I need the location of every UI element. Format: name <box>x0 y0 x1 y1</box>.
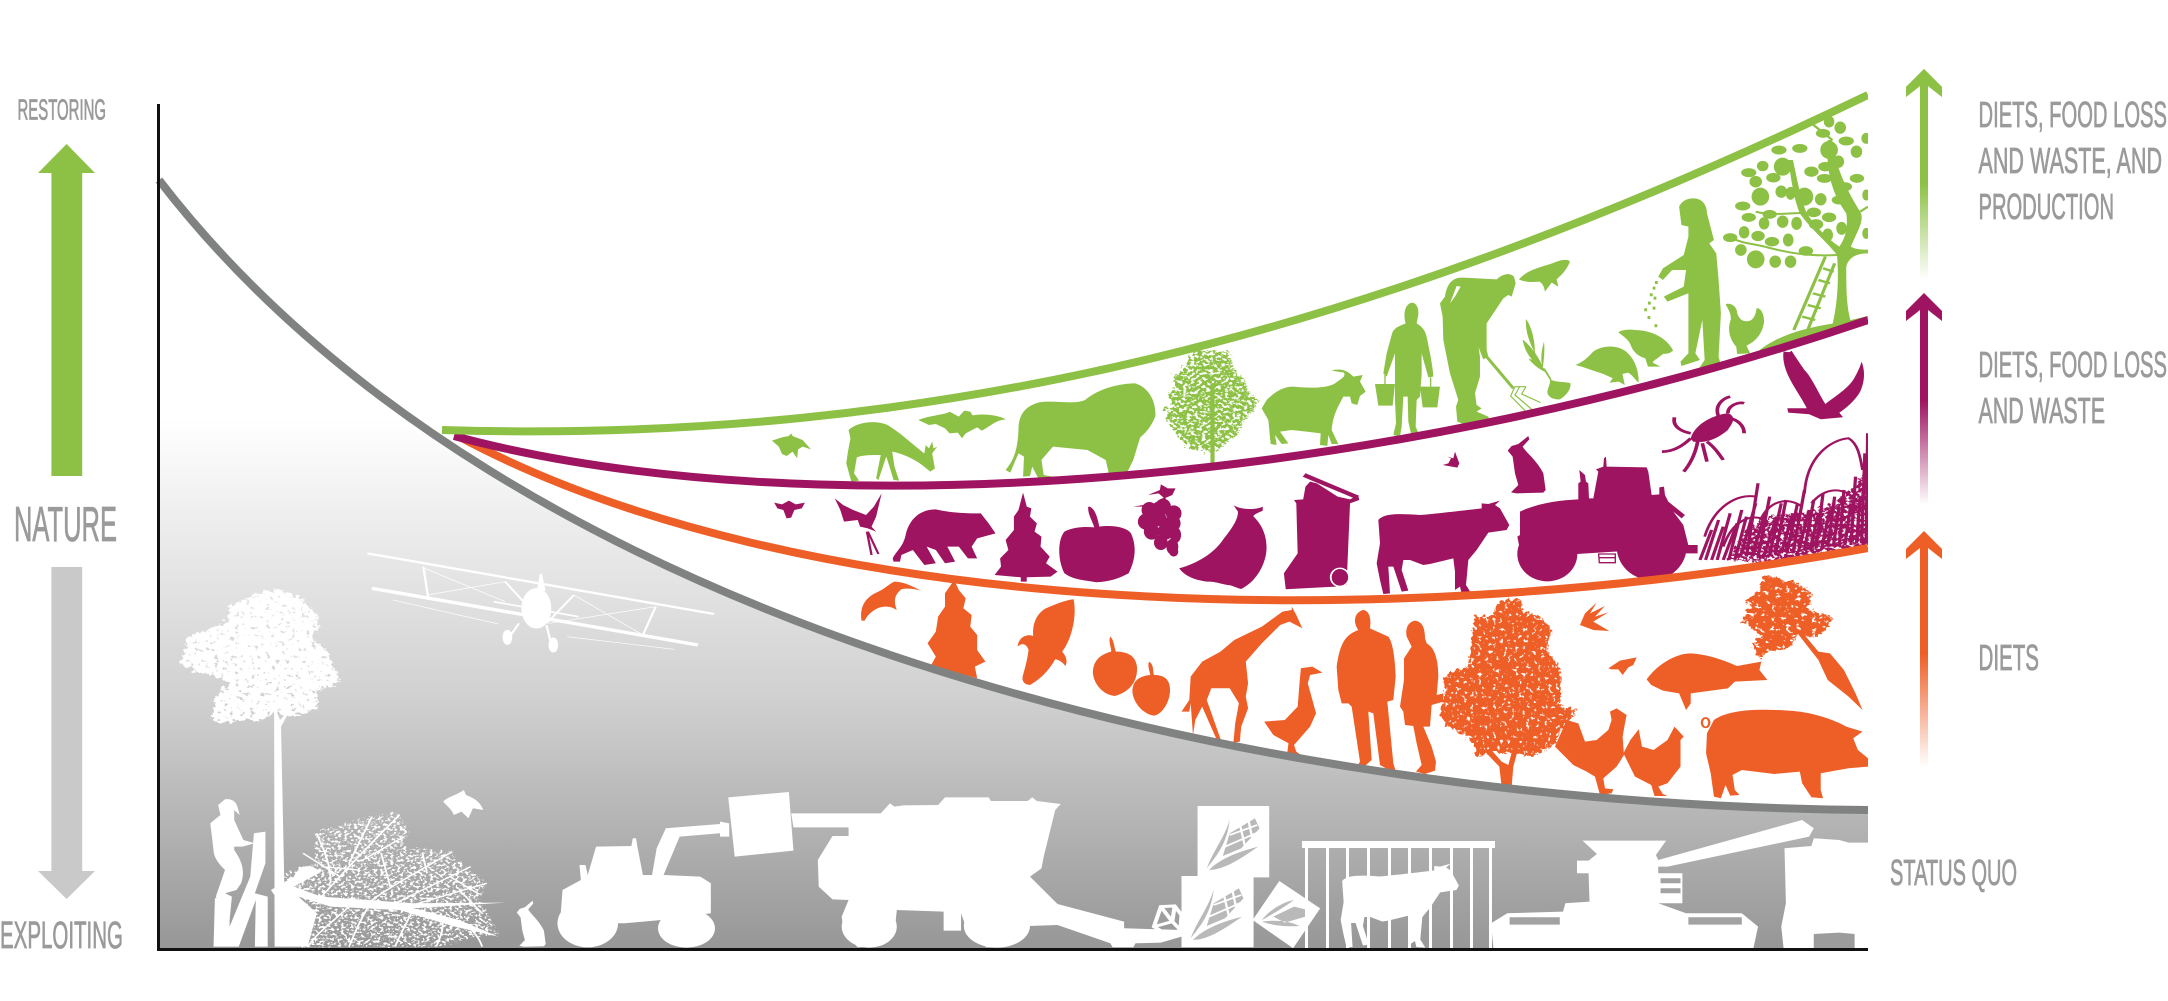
icon: crab <box>1662 397 1744 472</box>
axis label: nature: NATURE <box>14 498 117 552</box>
icon: bananas <box>1179 505 1267 589</box>
icon: fallen tree twigs <box>285 813 501 947</box>
icon: left scene <box>181 553 720 948</box>
panel: purple band left icons <box>774 475 1359 589</box>
panel: orange band left icons <box>861 580 1322 755</box>
icon: hawk <box>1783 351 1864 419</box>
icon: carrot top <box>1742 575 1833 658</box>
icon: tractor with loader <box>557 824 720 948</box>
icon: hen pecking back <box>1576 347 1639 385</box>
label: diets, food loss and waste, and production <box>1978 94 2167 227</box>
line: diets, food loss and production trajectory <box>442 95 1868 431</box>
panel: coloured icons <box>772 117 1870 798</box>
icon: fruit tree with ladder <box>1724 117 1870 353</box>
panel: orange band middle icons <box>1337 599 1637 795</box>
icon: standing tree crown <box>181 588 340 723</box>
icon: onion plant <box>1523 319 1571 399</box>
label: status quo: STATUS QUO <box>1890 852 2017 893</box>
icon: man <box>1337 610 1396 771</box>
arrow: restoring up <box>38 144 95 476</box>
icon: falling seeds <box>1644 281 1658 327</box>
icon: combine harvester <box>1491 820 1814 948</box>
icon: hex wheel <box>1154 906 1181 935</box>
axis: vertical and horizontal <box>158 104 1868 950</box>
icon: cut stump <box>214 832 268 947</box>
icon: orange butterfly <box>1608 657 1637 675</box>
icon: deer <box>846 422 937 482</box>
icon: carrot <box>1798 633 1863 710</box>
icon: waste bin <box>1284 475 1359 589</box>
icon: moth <box>772 433 811 458</box>
icon: grain cart <box>791 797 1181 948</box>
icon: crop-duster plane <box>367 553 714 652</box>
icon: standing rooster <box>1726 304 1764 354</box>
panel: green band middle icons <box>1262 260 1571 446</box>
icon: rice grass <box>1700 433 1869 563</box>
icon: corn <box>1018 599 1075 685</box>
panel: white silhouettes of exploitation <box>181 553 1868 948</box>
icon: swallow <box>1580 603 1609 631</box>
icon: standing tree trunk <box>266 703 294 947</box>
icon: lion <box>1006 383 1155 481</box>
icon: spruce <box>995 493 1058 582</box>
label: diets, food loss and waste <box>1978 344 2167 431</box>
icon: small swallow <box>1443 452 1459 468</box>
icon: rooster <box>1555 708 1627 795</box>
arrow: purple scenario <box>1920 400 1928 505</box>
icon: giraffe <box>1181 607 1302 743</box>
panel: purple band far right icons <box>1662 351 1864 472</box>
icon: hare <box>517 901 546 947</box>
arrow: purple scenario head <box>1906 293 1942 400</box>
icon: goat <box>1262 370 1366 446</box>
icon: cattle cage <box>1302 841 1495 948</box>
panel: green band right icons <box>1576 117 1870 385</box>
icon: right combine scene <box>1491 820 1868 948</box>
icon: rabbit <box>1508 436 1546 493</box>
icon: person with buckets <box>1375 303 1440 437</box>
icon: fish <box>1647 653 1767 710</box>
icon: grain truck <box>1781 838 1868 948</box>
panel: orange band right icons <box>1623 575 1868 798</box>
icon: grapes <box>1133 484 1181 557</box>
icon: birch tree crown <box>1161 350 1260 452</box>
icon: header teeth <box>1510 878 1742 925</box>
icon: peppers <box>1093 637 1170 716</box>
icon: goose <box>1264 667 1322 755</box>
arrow: orange scenario head <box>1906 531 1942 653</box>
icon: cow <box>1377 501 1509 594</box>
axis label: exploiting: EXPLOITING <box>0 915 123 957</box>
icon: butterfly <box>443 790 483 818</box>
icon: orange tree crown <box>1440 599 1577 757</box>
label: diets: DIETS <box>1978 637 2039 678</box>
icon: pig <box>1702 710 1868 798</box>
icon: large butterfly <box>1519 260 1570 292</box>
icon: heron <box>835 493 882 555</box>
icon: orange tree trunk <box>1487 747 1518 787</box>
icon: truck cab cut-out <box>1814 933 1855 948</box>
icon: fallen tree branches <box>271 815 505 947</box>
icon: woman <box>1400 621 1443 774</box>
icon: woman feeding chickens <box>1658 198 1721 368</box>
line: diets trajectory <box>458 436 1868 600</box>
icon: farmer with fork <box>1440 274 1541 424</box>
panel: trajectory curves <box>159 95 1868 810</box>
arrow: green scenario <box>1906 69 1942 280</box>
arrow: green scenario head <box>1906 69 1942 183</box>
icon: bat <box>918 411 1006 438</box>
icon: loader bale <box>720 792 793 857</box>
line: diets and food loss trajectory <box>454 320 1868 486</box>
panel: purple band right icons <box>1377 436 1698 594</box>
arrow: orange scenario <box>1920 653 1928 767</box>
icon: caged cow <box>1341 864 1459 948</box>
icon: pumpkin <box>1059 507 1135 582</box>
panel: green band left icons <box>772 350 1260 482</box>
icon: bear <box>893 509 996 565</box>
chart: status quo gradient area <box>159 180 1868 948</box>
icon: birch tree trunk <box>1210 383 1215 469</box>
icon: hen pecking front <box>1618 330 1673 367</box>
axis label: restoring: RESTORING <box>18 94 106 126</box>
line: status quo trajectory <box>159 180 1868 810</box>
icon: middle machinery scene <box>720 792 1320 948</box>
icon: orange spruce <box>928 580 985 678</box>
icon: gull <box>861 582 921 621</box>
arrow: exploiting down <box>38 567 95 899</box>
icon: lumberjack <box>210 799 255 920</box>
icon: hen <box>1623 727 1684 796</box>
icon: tractor <box>1517 457 1698 581</box>
icon: corn boxes <box>1181 806 1320 948</box>
icon: bee <box>774 501 805 518</box>
